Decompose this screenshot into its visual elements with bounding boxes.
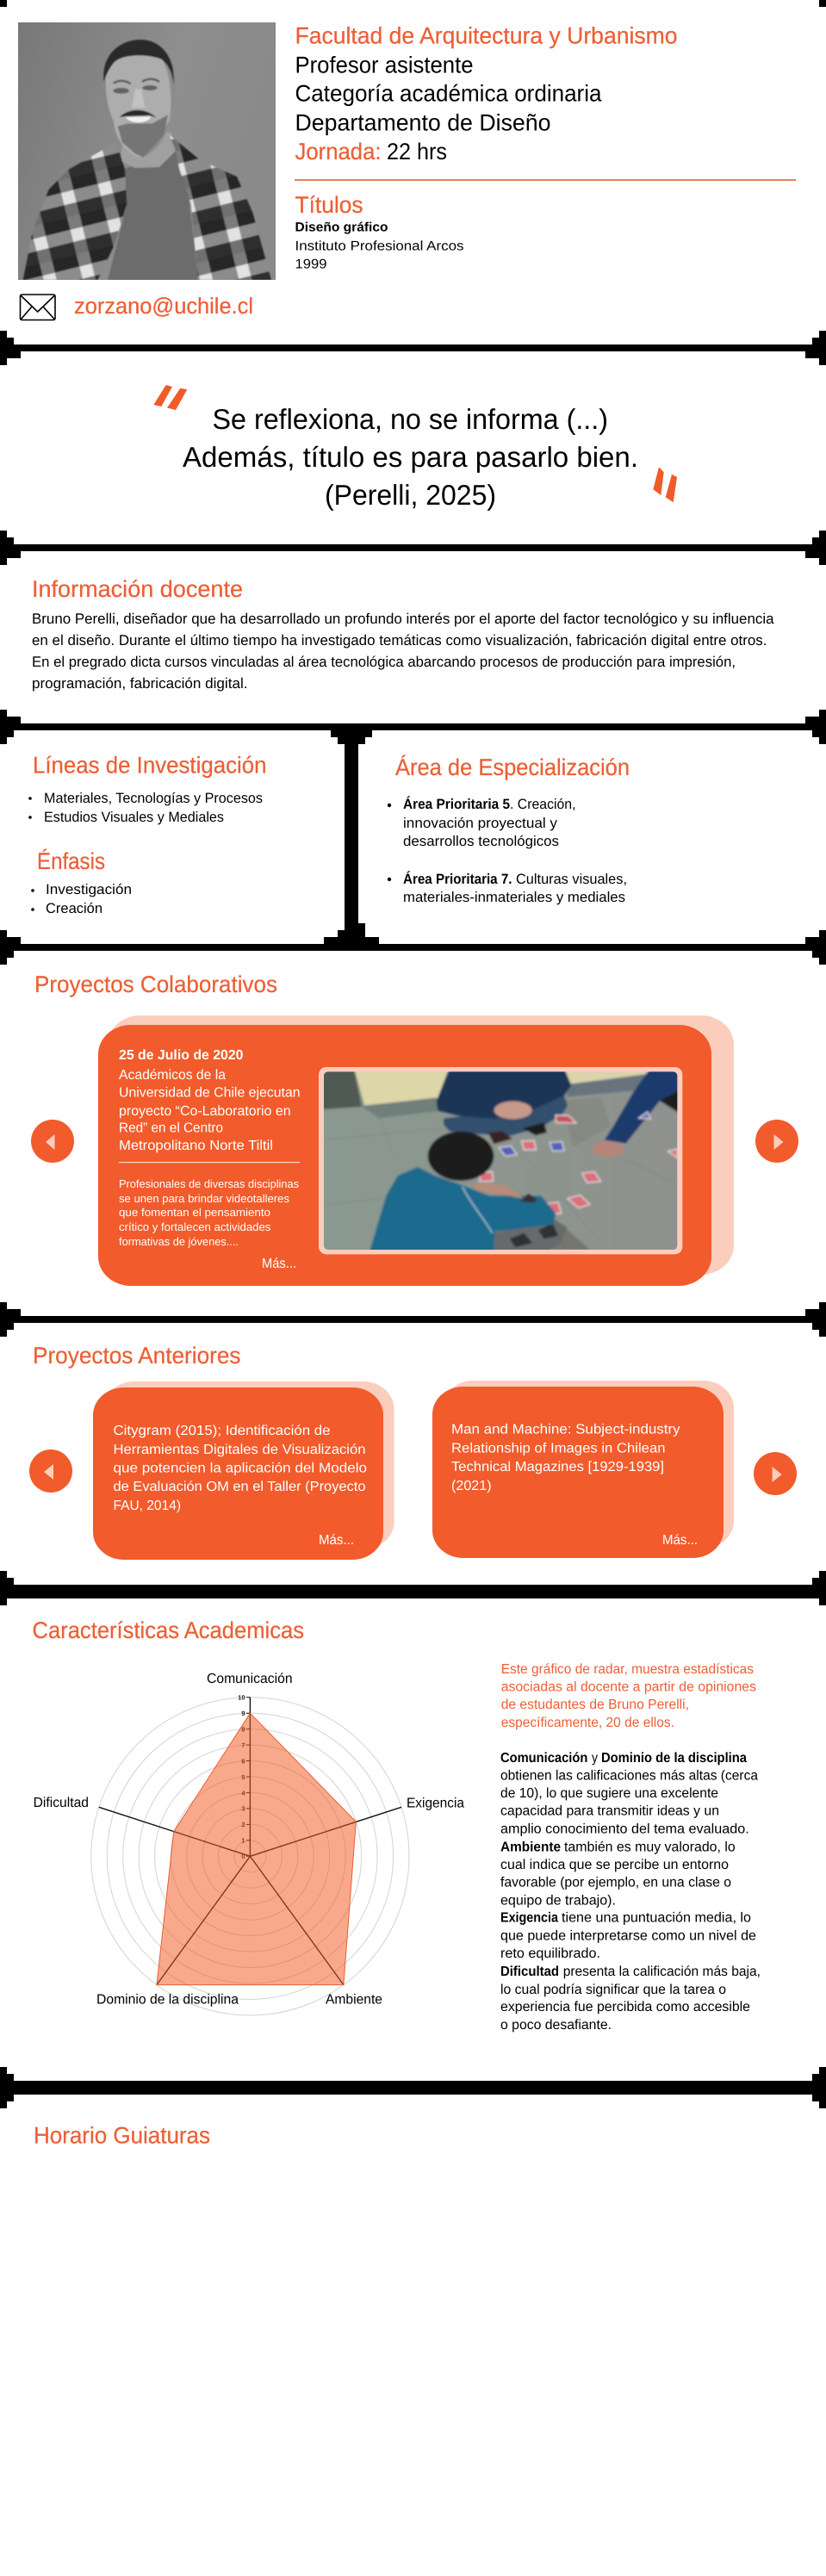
project text: que potencien la aplicación del Modelo <box>114 1462 367 1476</box>
axis scale <box>238 1693 245 1860</box>
axis scale: 1 <box>241 1837 245 1845</box>
text: radar analysis: tiene una puntuación media, lo <box>562 1911 751 1926</box>
text: radar analysis: presenta la calificación más baja, <box>563 1965 761 1979</box>
text: radar analysis <box>500 1751 761 2033</box>
dividers <box>0 331 826 2108</box>
project text: Herramientas Digitales de Visualización <box>114 1443 365 1457</box>
heading: Información docente <box>32 576 243 602</box>
year: 1999 <box>295 258 327 272</box>
list: Investigación <box>46 882 132 897</box>
project summary: Profesionales de diversas disciplinas <box>119 1177 299 1190</box>
list: Área Prioritaria 5 <box>403 796 510 812</box>
panel: teaching information <box>32 576 774 692</box>
axis scale: 9 <box>241 1710 245 1717</box>
project text <box>451 1423 680 1493</box>
more link: Más... <box>662 1533 698 1548</box>
profile header <box>295 23 677 164</box>
list: desarrollos tecnológicos <box>403 834 559 849</box>
text: radar intro: específicamente, 20 de ellos. <box>501 1716 674 1730</box>
quote <box>153 385 677 511</box>
text: radar analysis: de 10), lo que sugiere una excelente <box>500 1786 718 1801</box>
axis scale: 10 <box>238 1693 245 1702</box>
text: radar intro: asociadas al docente a partir de opiniones <box>501 1680 756 1695</box>
list <box>388 796 627 905</box>
paragraph: en el diseño. Durante el último tiempo ha investigado temáticas como visualización, fabricación digital entre otros. <box>32 632 767 649</box>
project title: proyecto “Co-Laboratorio en <box>119 1104 291 1119</box>
axis scale: 7 <box>241 1741 245 1749</box>
text: radar analysis: que puede interpretarse como un nivel de <box>500 1929 756 1944</box>
project summary: formativas de jóvenes.... <box>119 1235 239 1248</box>
text: radar analysis: y <box>592 1751 598 1766</box>
project text: Citygram (2015); Identificación de <box>114 1424 331 1438</box>
heading: Área de Especialización <box>395 754 630 780</box>
project title: Metropolitano Norte Tiltil <box>119 1139 273 1153</box>
data polygon <box>157 1713 356 1985</box>
axis scale: 3 <box>241 1805 245 1813</box>
portrait photo <box>18 22 276 280</box>
panel: previous project man and machine <box>432 1381 734 1558</box>
arrow: previous projects back <box>29 1449 72 1493</box>
department: Departamento de Diseño <box>295 110 551 136</box>
project text: de Evaluación OM en el Taller (Proyecto <box>114 1480 366 1494</box>
degree name: Diseño gráfico <box>295 220 388 235</box>
project text <box>114 1424 367 1513</box>
text: radar analysis: Comunicación <box>500 1751 587 1766</box>
panel: previous project citygram <box>93 1381 394 1560</box>
axis labels: Dominio de la disciplina <box>96 1993 239 2008</box>
icon: envelope <box>21 295 55 320</box>
panel: research lines <box>28 753 266 825</box>
workload label: Jornada: <box>295 139 381 164</box>
paragraph <box>32 611 774 692</box>
project summary: que fomentan el pensamiento <box>119 1206 270 1219</box>
list <box>28 791 263 825</box>
date: 25 de Julio de 2020 <box>119 1048 244 1063</box>
more link: Más... <box>319 1533 354 1548</box>
project title: Universidad de Chile ejecutan <box>119 1086 301 1101</box>
project title: Red” en el Centro <box>119 1121 223 1136</box>
project photo <box>319 1067 682 1255</box>
project summary: se unen para brindar videotalleres <box>119 1192 289 1205</box>
list: Creación <box>46 901 102 916</box>
radar chart <box>34 1672 464 2015</box>
panel: emphasis <box>31 848 132 916</box>
project text: FAU, 2014) <box>114 1499 181 1513</box>
workload value: 22 hrs <box>387 139 447 164</box>
text: radar analysis: Dominio de la disciplina <box>601 1751 747 1766</box>
project summary <box>119 1177 299 1248</box>
degrees heading: Títulos <box>295 192 363 218</box>
text: radar analysis: equipo de trabajo). <box>500 1894 616 1909</box>
heading: collaborative projects: Proyectos Colaborativos <box>34 971 277 997</box>
axis labels: Ambiente <box>326 1993 382 2008</box>
axis scale: 0 <box>241 1853 245 1860</box>
paragraph: En el pregrado dicta cursos vinculadas al área tecnológica abarcando procesos de producción para impresión, <box>32 654 736 670</box>
project text: Technical Magazines [1929-1939] <box>451 1460 664 1474</box>
paragraph: Bruno Perelli, diseñador que ha desarrollado un profundo interés por el aporte del factor tecnológico y su influencia <box>32 611 774 627</box>
axis scale: 8 <box>241 1725 245 1733</box>
list: . Creación, <box>510 797 575 812</box>
list: Culturas visuales, <box>516 872 627 887</box>
panel: collaborative project card <box>98 1015 734 1286</box>
text: radar analysis: capacidad para transmitir ideas y un <box>500 1804 719 1819</box>
axis labels: Dificultad <box>34 1796 89 1810</box>
text: radar analysis: cual indica que se percibe un entorno <box>500 1858 729 1872</box>
text: radar analysis: también es muy valorado, lo <box>564 1840 736 1855</box>
text: radar analysis: o poco desafiante. <box>500 2018 612 2033</box>
faculty: Facultad de Arquitectura y Urbanismo <box>295 23 677 49</box>
list <box>31 882 132 916</box>
list: Estudios Visuales y Mediales <box>44 810 224 825</box>
heading: academic characteristics: Características Academicas <box>33 1617 304 1643</box>
heading: Énfasis <box>37 848 105 874</box>
project title: Académicos de la <box>119 1068 226 1083</box>
text: radar analysis: lo cual podría significar que la tarea o <box>500 1983 726 1997</box>
arrow: previous projects forward <box>754 1452 797 1495</box>
project text: (2021) <box>451 1479 492 1493</box>
quote line 3: (Perelli, 2025) <box>325 479 496 511</box>
text: radar intro: de estudantes de Bruno Perelli, <box>501 1698 689 1712</box>
project text: Man and Machine: Subject-industry <box>451 1423 680 1437</box>
text: radar intro: Este gráfico de radar, muestra estadísticas <box>501 1662 754 1677</box>
text: radar analysis: experiencia fue percibida como accesible <box>500 2000 750 2014</box>
email: zorzano@uchile.cl <box>74 293 253 319</box>
icon: opening quote <box>153 385 187 410</box>
text: radar analysis: obtienen las calificaciones más altas (cerca <box>500 1769 758 1784</box>
arrow: previous collaborative <box>31 1120 74 1163</box>
list: Materiales, Tecnologías y Procesos <box>44 791 263 806</box>
list: innovación proyectual y <box>403 816 558 831</box>
paragraph: programación, fabricación digital. <box>32 675 248 692</box>
list: Área Prioritaria 7. <box>403 871 512 887</box>
institute: Instituto Profesional Arcos <box>295 239 464 254</box>
text: radar analysis: favorable (por ejemplo, en una clase o <box>500 1876 731 1890</box>
page corner marks <box>0 0 826 7</box>
project summary: crítico y fortalecen actividades <box>119 1220 271 1233</box>
position: Profesor asistente <box>295 53 474 78</box>
text: radar analysis: reto equilibrado. <box>500 1946 600 1961</box>
text: radar analysis: amplio conocimiento del tema evaluado. <box>500 1822 749 1837</box>
quote line 2: Además, título es para pasarlo bien. <box>183 441 638 473</box>
heading: Líneas de Investigación <box>33 753 267 779</box>
icon: closing quote <box>653 467 677 502</box>
list: materiales-inmateriales y mediales <box>403 890 625 905</box>
arrow: next collaborative <box>755 1120 798 1163</box>
heading: tutoring schedule: Horario Guiaturas <box>34 2123 210 2149</box>
project text: Relationship of Images in Chilean <box>451 1442 665 1456</box>
text: radar analysis: Ambiente <box>500 1840 561 1855</box>
category: Categoría académica ordinaria <box>295 81 602 107</box>
panel: specialization <box>388 754 630 905</box>
axis labels <box>34 1672 464 2008</box>
axis scale: 2 <box>241 1821 245 1828</box>
text: radar analysis: Dificultad <box>500 1965 559 1979</box>
project title <box>119 1068 301 1153</box>
quote line 1: Se reflexiona, no se informa (...) <box>212 403 608 435</box>
axis scale: 4 <box>241 1789 245 1797</box>
more link: Más... <box>262 1257 296 1271</box>
text: radar intro <box>501 1662 756 1730</box>
axis scale: 5 <box>241 1773 245 1781</box>
degrees <box>295 192 464 272</box>
text: radar analysis: Exigencia <box>500 1911 558 1926</box>
axis labels: Comunicación <box>207 1672 293 1686</box>
axis labels: Exigencia <box>407 1797 464 1811</box>
heading: previous projects: Proyectos Anteriores <box>33 1343 241 1369</box>
axis scale: 6 <box>241 1757 245 1765</box>
